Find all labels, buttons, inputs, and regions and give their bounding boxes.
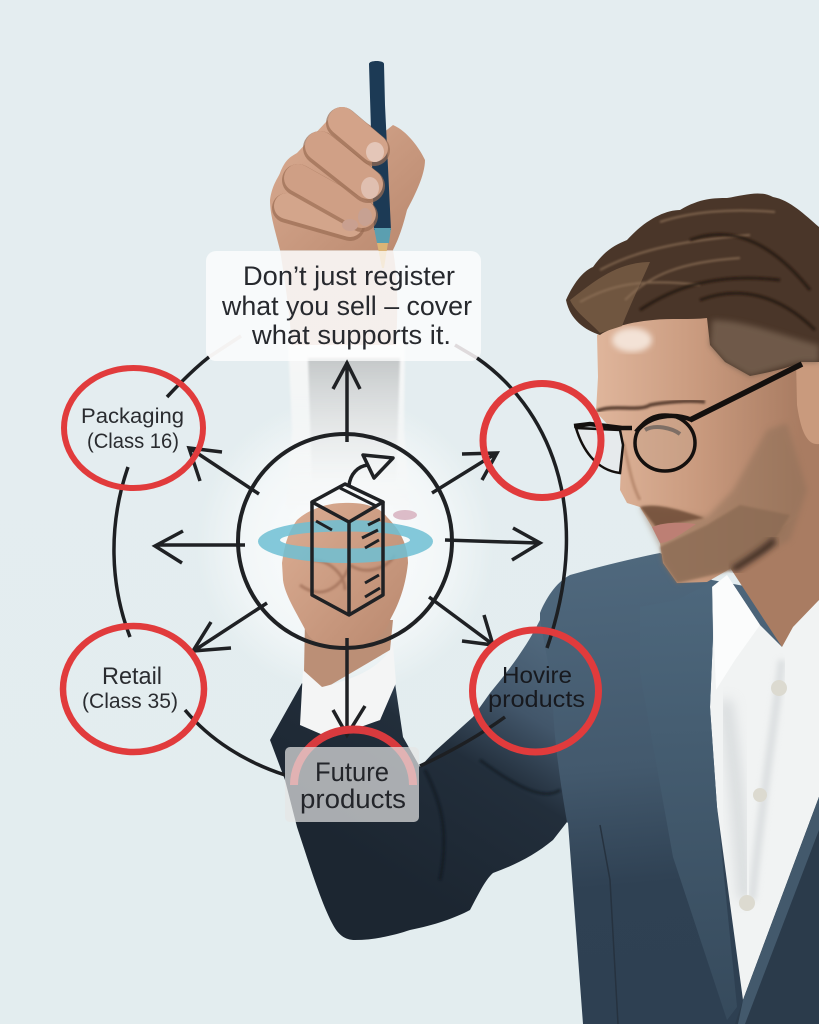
- node: empty top right: [483, 384, 601, 498]
- panel: headline callout: what supports it.: [251, 320, 451, 350]
- node: retail: [63, 626, 204, 752]
- man: left lapel: [640, 582, 737, 1020]
- arrow: up: [333, 362, 360, 442]
- arrows: [155, 362, 540, 735]
- shirt cuff: [300, 645, 396, 738]
- man: face: [596, 300, 819, 583]
- connector arcs: [114, 336, 566, 775]
- fingernails: [342, 142, 384, 231]
- panel: headline callout: Don’t just register: [243, 261, 455, 291]
- man: hair: [566, 193, 819, 376]
- man: ear: [796, 355, 819, 444]
- node: hovire products: [472, 630, 598, 752]
- center glow: [195, 395, 495, 695]
- arrow: left: [155, 531, 245, 563]
- arrow: upper right: [432, 453, 497, 493]
- panel: headline callout: [206, 251, 481, 361]
- pen: [369, 61, 391, 268]
- node: hovire products: products: [488, 686, 585, 712]
- man: shirt: [710, 575, 819, 1000]
- man: arm sleeve: [270, 620, 567, 940]
- arrow: down: [333, 638, 365, 735]
- node: packaging: [64, 368, 203, 488]
- node: retail: (Class 35): [82, 689, 178, 713]
- arrow: right: [445, 528, 540, 560]
- node: hovire products: Hovire: [502, 662, 572, 688]
- central circle: [238, 434, 452, 648]
- arrow: upper left: [189, 448, 259, 494]
- node: future products: [285, 730, 419, 822]
- node: future products: products: [300, 784, 406, 814]
- fingers: [287, 121, 374, 226]
- icon: teal orbit ring: [258, 520, 433, 563]
- node: retail: Retail: [102, 663, 162, 690]
- node: packaging: Packaging: [81, 404, 184, 428]
- man: right lapel: [735, 797, 819, 1024]
- man: glasses: [574, 364, 802, 473]
- upper hand holding pen: [270, 61, 425, 345]
- node: future products: Future: [315, 757, 389, 787]
- ghost forearm sleeve: [284, 340, 412, 530]
- lower hand: [282, 503, 417, 690]
- man: jacket body: [540, 553, 819, 1024]
- panel: headline callout: what you sell – cover: [221, 291, 472, 321]
- node: packaging: (Class 16): [87, 430, 179, 453]
- icon: product box with arrow: [312, 455, 393, 615]
- arrow: lower right: [429, 597, 493, 645]
- arrow: lower left: [193, 603, 267, 651]
- man: neck: [700, 400, 819, 647]
